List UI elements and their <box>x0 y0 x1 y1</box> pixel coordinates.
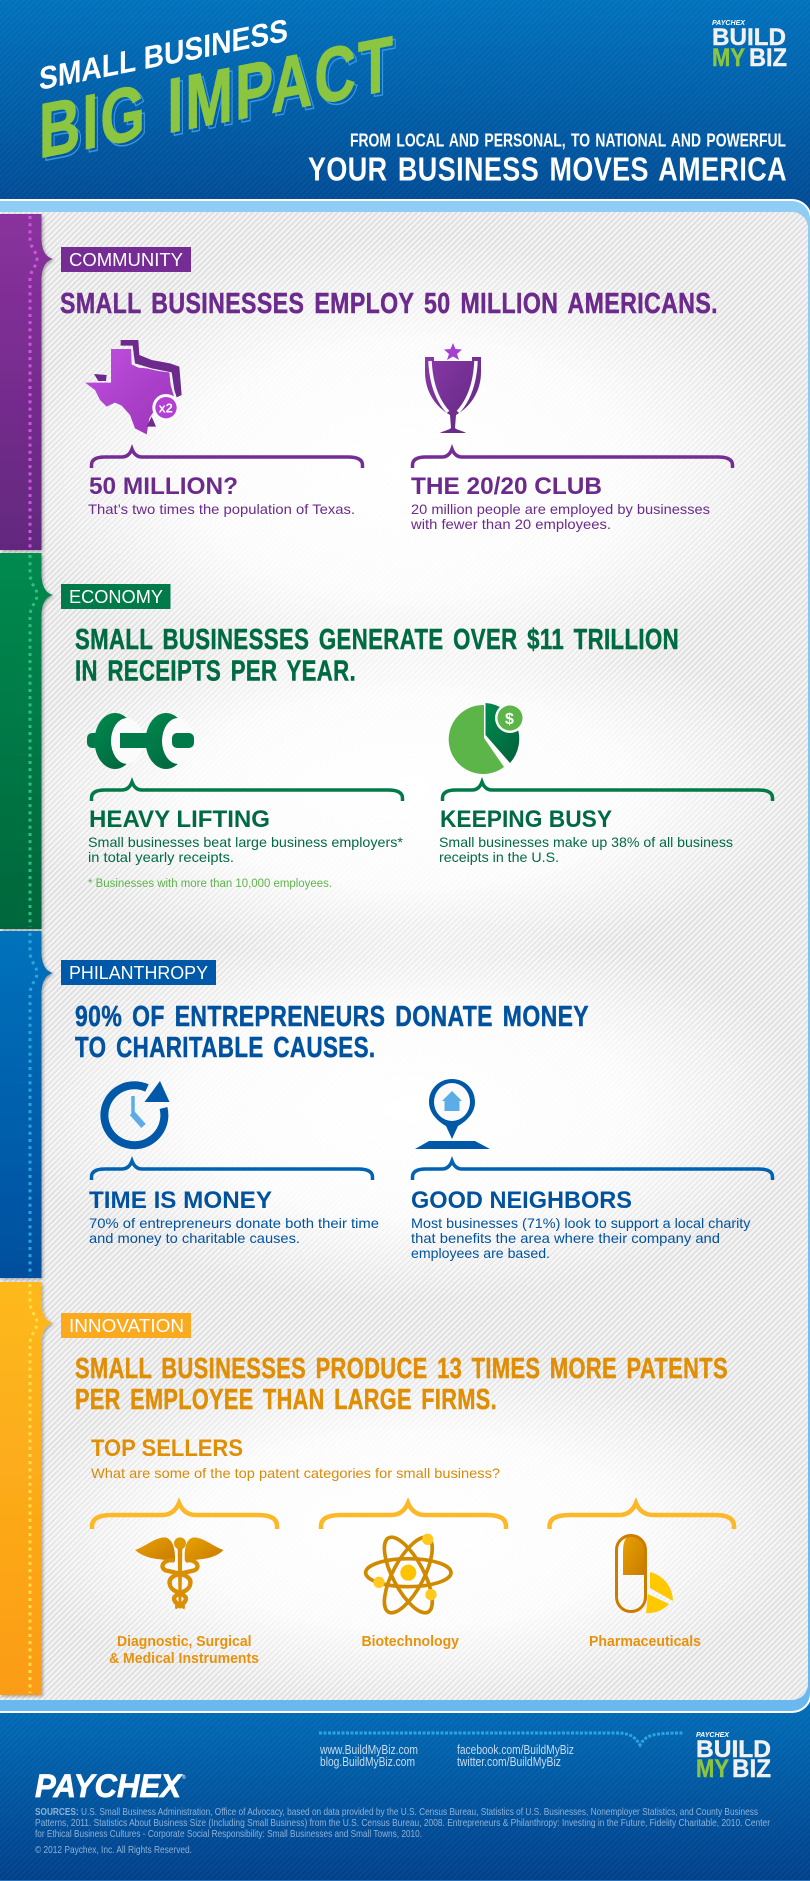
text block: keeping busy: KEEPING BUSY <box>440 806 612 833</box>
icon: pie chart with dollar coin: $ <box>505 711 514 728</box>
panel: economy <box>0 553 772 929</box>
text block: keeping busy <box>439 782 772 865</box>
title line: big impact: BIG IMPACT <box>39 20 395 175</box>
sources and copyright: for Ethical Business Cultures - Corporate Social Responsibility: Small Businesses and Small Towns, 2010. <box>35 1828 422 1840</box>
text block: heavy lifting: Small businesses beat large business employers* <box>88 834 404 850</box>
icon: texas map: x2 <box>159 401 173 415</box>
text block: 50 million <box>88 449 362 517</box>
category tag: community <box>61 247 191 272</box>
text block: good neighbors: GOOD NEIGHBORS <box>411 1187 632 1214</box>
footer links: twitter.com/BuildMyBiz <box>457 1754 561 1769</box>
section strip: innovation <box>0 1282 53 1695</box>
category tag: community: COMMUNITY <box>69 250 183 270</box>
category: diagnostic, surgical and medical instruments: & Medical Instruments <box>109 1651 259 1667</box>
logo: build my biz footer: BIZ <box>732 1755 771 1783</box>
icon: texas map <box>85 340 182 434</box>
header background <box>0 0 810 230</box>
text block: 20/20 club: THE 20/20 CLUB <box>411 473 602 500</box>
icon: trophy <box>425 343 481 433</box>
footer links: blog.BuildMyBiz.com <box>320 1754 415 1769</box>
text block: time is money <box>89 1161 379 1246</box>
logo: paychex: ® <box>182 1774 186 1781</box>
text block: heavy lifting <box>88 782 404 890</box>
title line: big impact <box>39 20 398 178</box>
text block: good neighbors <box>411 1161 772 1261</box>
category: pharmaceuticals <box>550 1503 734 1650</box>
icon: dumbbell <box>87 713 194 769</box>
footer links: www.BuildMyBiz.com <box>319 1742 418 1757</box>
category tag: economy <box>61 584 170 609</box>
headline: innovation <box>75 1353 728 1416</box>
text block: 20/20 club: with fewer than 20 employees. <box>410 516 611 532</box>
category: pharmaceuticals: Pharmaceuticals <box>589 1634 701 1650</box>
text block: 20/20 club <box>410 449 732 532</box>
icon: capsule and pie <box>616 1536 673 1613</box>
title line: big impact: BIG IMPACT <box>42 23 398 178</box>
logo: build my biz top <box>712 20 787 72</box>
title: small business big impact <box>39 12 398 178</box>
section strip: philanthropy <box>0 931 53 1278</box>
text block: keeping busy: Small businesses make up 38% of all business <box>439 834 733 850</box>
subtitle <box>308 130 787 188</box>
text block: 50 million: That’s two times the population of Texas. <box>88 501 355 517</box>
section strip: community <box>0 214 53 550</box>
logo: build my biz footer: BUILD <box>696 1736 771 1763</box>
headline: philanthropy <box>75 1001 589 1064</box>
text block: good neighbors: that benefits the area where their company and <box>411 1230 720 1246</box>
category: diagnostic, surgical and medical instruments <box>92 1503 277 1667</box>
category tag: philanthropy: PHILANTHROPY <box>69 963 208 983</box>
category: biotechnology <box>321 1503 506 1650</box>
text block: heavy lifting: in total yearly receipts. <box>88 849 234 865</box>
text block: time is money: TIME IS MONEY <box>89 1187 272 1214</box>
headline: philanthropy: TO CHARITABLE CAUSES. <box>75 1032 376 1064</box>
category: diagnostic, surgical and medical instruments: Diagnostic, Surgical <box>117 1634 252 1650</box>
text block: good neighbors: Most businesses (71%) look to support a local charity <box>411 1215 750 1231</box>
text block: heavy lifting: HEAVY LIFTING <box>89 806 270 833</box>
category: biotechnology: Biotechnology <box>362 1634 459 1650</box>
text block: heavy lifting: * Businesses with more than 10,000 employees. <box>88 878 332 890</box>
category tag: innovation <box>61 1313 191 1338</box>
logo: build my biz footer: PAYCHEX <box>696 1732 730 1739</box>
text block: 20/20 club: 20 million people are employed by businesses <box>411 501 710 517</box>
content panel background <box>0 212 810 1705</box>
panel: philanthropy <box>0 931 772 1278</box>
headline: innovation: PER EMPLOYEE THAN LARGE FIRMS. <box>75 1384 497 1416</box>
footer links <box>319 1733 684 1769</box>
headline: economy: IN RECEIPTS PER YEAR. <box>75 656 356 688</box>
text block: top sellers: What are some of the top patent categories for small business? <box>91 1465 500 1481</box>
headline: economy <box>75 624 679 688</box>
logo: build my biz footer: MY <box>696 1755 729 1783</box>
logo: build my biz top: BIZ <box>749 44 787 72</box>
category tag: innovation: INNOVATION <box>69 1316 184 1336</box>
footer background <box>0 1680 810 1881</box>
logo: build my biz top: MY <box>712 44 745 72</box>
category tag: economy: ECONOMY <box>69 587 163 607</box>
icon: atom <box>366 1531 451 1619</box>
section strip: economy <box>0 553 53 929</box>
sources and copyright <box>35 1806 770 1856</box>
panel: community <box>0 214 732 550</box>
text block: top sellers: TOP SELLERS <box>91 1435 243 1462</box>
text block: top sellers <box>91 1435 500 1481</box>
logo: paychex: PAYCHEX <box>35 1768 183 1804</box>
footer links: facebook.com/BuildMyBiz <box>457 1742 574 1757</box>
title line: small business: SMALL BUSINESS <box>39 12 288 97</box>
text block: time is money: 70% of entrepreneurs donate both their time <box>89 1215 379 1231</box>
panel: innovation <box>0 1282 734 1695</box>
icon: clock with arrow <box>104 1081 170 1145</box>
sources and copyright: © 2012 Paychex, Inc. All Rights Reserved. <box>35 1844 192 1856</box>
text block: 50 million: 50 MILLION? <box>89 473 238 500</box>
headline: philanthropy: 90% OF ENTREPRENEURS DONATE MONEY <box>75 1001 589 1033</box>
icon: pie chart with dollar coin <box>449 703 525 774</box>
text block: keeping busy: receipts in the U.S. <box>439 849 559 865</box>
icon: caduceus <box>135 1537 224 1608</box>
text block: time is money: and money to charitable causes. <box>89 1230 300 1246</box>
logo: build my biz top: PAYCHEX <box>712 20 746 27</box>
icon: location pin with house <box>415 1079 490 1149</box>
logo: build my biz top: BUILD <box>712 24 786 51</box>
text block: good neighbors: employees are based. <box>411 1245 550 1261</box>
logo: build my biz footer <box>696 1732 771 1783</box>
